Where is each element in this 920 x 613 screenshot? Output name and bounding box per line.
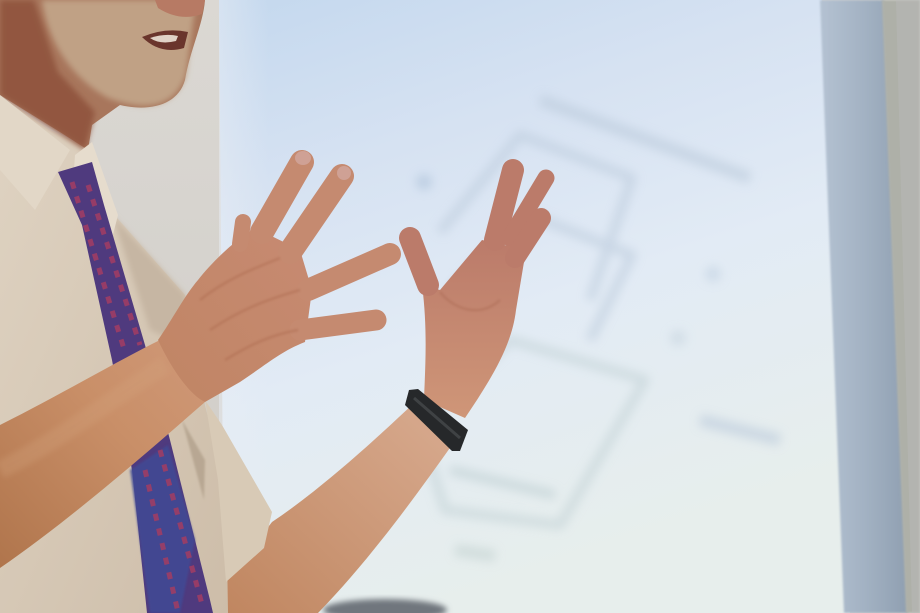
neck and face: [0, 0, 205, 150]
wall: [0, 0, 225, 613]
near arm: [0, 340, 205, 568]
shirt sleeve: [205, 400, 272, 582]
near hand with spread fingers: [158, 151, 390, 402]
far arm: forearm: [226, 402, 452, 613]
shirt collar: [0, 95, 118, 270]
right wall strip: [882, 0, 920, 613]
shirt torso: [0, 95, 228, 613]
far hand, palm facing viewer: [410, 170, 546, 418]
necktie: [58, 162, 213, 613]
shape at foot of screen: [323, 599, 447, 613]
projection screen: [219, 0, 850, 613]
wristband: [405, 389, 468, 451]
screen frame: blue-gray band: [820, 0, 908, 613]
thumb: [240, 222, 243, 244]
blurred diagram on screen: [416, 100, 780, 556]
